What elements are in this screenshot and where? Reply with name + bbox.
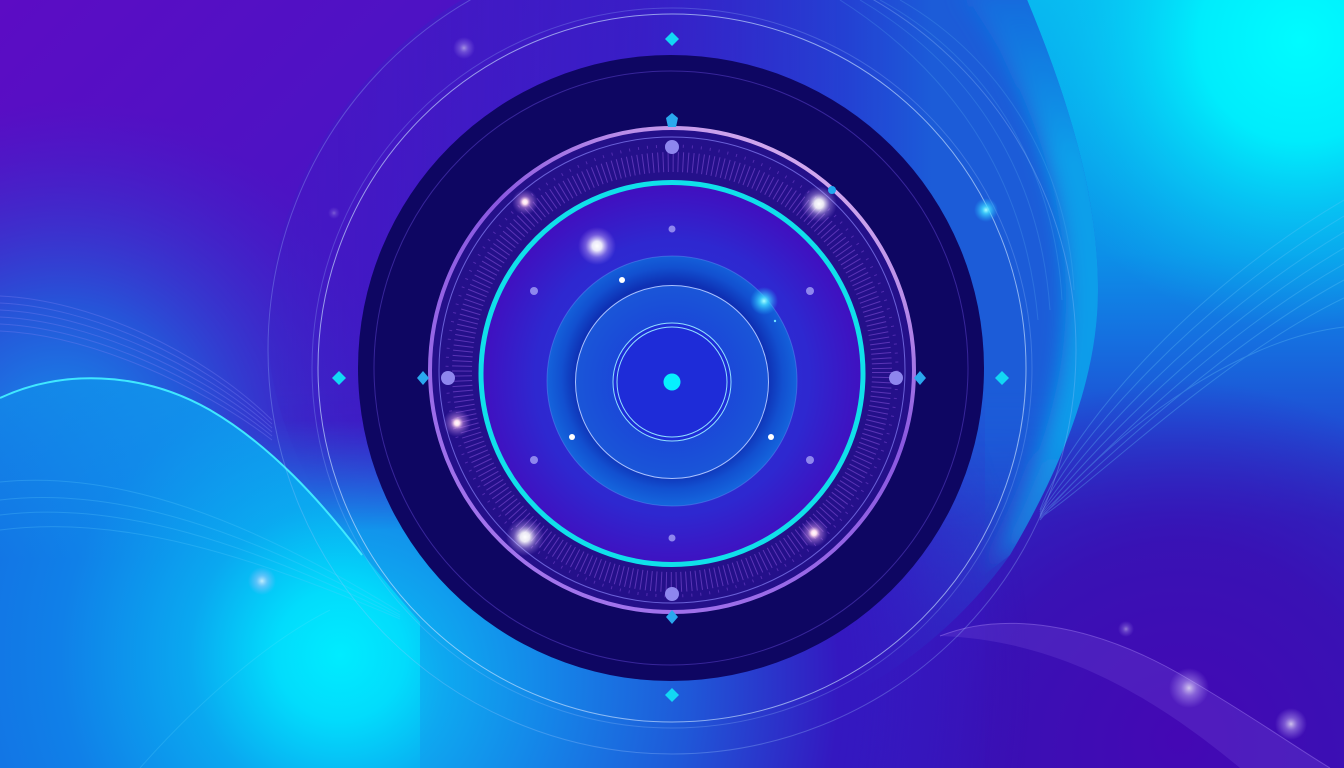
lower right ribbon [940, 623, 1330, 768]
cyan ring and inner field [481, 182, 863, 564]
cyan diamonds [332, 32, 1009, 702]
dark disc inner line [374, 71, 968, 665]
white dots [569, 277, 774, 440]
glowing lights [248, 37, 1307, 740]
right mesh lines [1040, 200, 1344, 520]
outer purple ring [429, 127, 915, 613]
blue centre discs [547, 256, 797, 506]
lilac markers [441, 140, 903, 601]
large blue swoosh around the disc [363, 0, 1098, 646]
left wave [0, 296, 420, 768]
right crescent highlight [971, 0, 1098, 566]
crescent fine lines [840, 0, 1074, 320]
dark disc [358, 55, 984, 681]
outer thin rings [268, 0, 1076, 754]
tick band [447, 146, 897, 596]
bottom sweep around disc [252, 430, 992, 768]
centre dot [664, 374, 680, 390]
